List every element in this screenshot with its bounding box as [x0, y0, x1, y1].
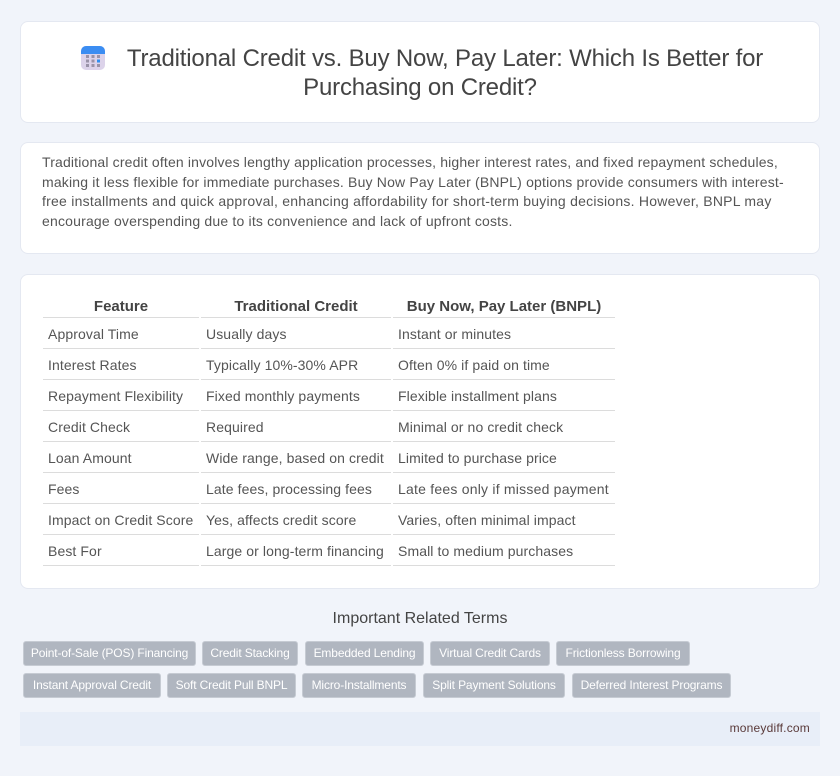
row: Impact on Credit Score: Impact on Credit Score	[48, 512, 193, 528]
panel: comparison table	[20, 274, 820, 589]
row: Repayment Flexibility: Flexible installment plans	[398, 388, 557, 404]
title: Traditional Credit vs. Buy Now, Pay Later: Which Is Better for	[127, 45, 763, 72]
row: Fees: Late fees, processing fees	[206, 481, 372, 497]
tag	[556, 641, 690, 666]
row: Best For: Large or long-term financing	[206, 543, 384, 559]
tag	[572, 673, 731, 698]
summary paragraph	[42, 154, 784, 229]
row: Interest Rates: Interest Rates	[48, 357, 137, 373]
summary paragraph: Traditional credit often involves lengthy application processes, higher interest rates, and fixed repayment schedules,	[42, 154, 778, 170]
row: Credit Check	[48, 419, 564, 435]
tag	[423, 673, 565, 698]
tag: Split Payment Solutions	[432, 678, 556, 692]
tag: Credit Stacking	[210, 646, 290, 660]
tag: Point-of-Sale (POS) Financing	[31, 646, 188, 660]
summary paragraph: making it less flexible for immediate purchases. Buy Now Pay Later (BNPL) options provide consumers with interest-	[42, 174, 784, 190]
tag	[23, 673, 161, 698]
row: Best For	[48, 543, 573, 559]
tag list: related terms	[23, 641, 731, 698]
tag	[23, 641, 196, 666]
tag	[305, 641, 424, 666]
row: Repayment Flexibility	[48, 388, 557, 404]
comparison table	[43, 298, 615, 566]
footer bar	[20, 712, 820, 746]
tag: Virtual Credit Cards	[439, 646, 541, 660]
row: Approval Time: Instant or minutes	[398, 326, 511, 342]
row: Repayment Flexibility: Repayment Flexibility	[48, 388, 183, 404]
row: Approval Time	[48, 326, 511, 342]
tag: Deferred Interest Programs	[581, 678, 722, 692]
heading: related terms: Important Related Terms	[333, 610, 507, 627]
summary paragraph: free installments and quick approval, enhancing affordability for short-term buying decisions. However, BNPL may	[42, 193, 772, 209]
tag: Instant Approval Credit	[33, 678, 151, 692]
column heading: Feature: Feature	[94, 298, 148, 315]
row: Loan Amount: Limited to purchase price	[398, 450, 557, 466]
row: Loan Amount: Loan Amount	[48, 450, 132, 466]
row: Credit Check: Credit Check	[48, 419, 130, 435]
row: Interest Rates	[48, 357, 550, 373]
panel: summary	[20, 142, 820, 254]
row: Credit Check: Required	[206, 419, 264, 435]
column heading: Traditional Credit: Traditional Credit	[234, 298, 358, 315]
row: Impact on Credit Score	[48, 512, 576, 528]
tag	[202, 641, 298, 666]
tag: Soft Credit Pull BNPL	[176, 678, 287, 692]
row: Repayment Flexibility: Fixed monthly payments	[206, 388, 360, 404]
icon: calendar	[81, 46, 105, 70]
footer site name: moneydiff.com	[730, 721, 810, 735]
row: Approval Time: Usually days	[206, 326, 287, 342]
tag: Frictionless Borrowing	[566, 646, 680, 660]
tag	[430, 641, 550, 666]
row: Best For: Small to medium purchases	[398, 543, 573, 559]
summary paragraph: encourage overspending due to its convenience and lack of upfront costs.	[42, 213, 513, 229]
title	[127, 45, 763, 101]
tag: Micro-Installments	[312, 678, 406, 692]
row: Impact on Credit Score: Varies, often minimal impact	[398, 512, 576, 528]
row: Interest Rates: Typically 10%-30% APR	[206, 357, 358, 373]
row: Loan Amount	[48, 450, 557, 466]
panel: header	[20, 21, 820, 123]
row: Impact on Credit Score: Yes, affects credit score	[206, 512, 356, 528]
row: Loan Amount: Wide range, based on credit	[206, 450, 384, 466]
title: Purchasing on Credit?	[303, 74, 537, 101]
row: Interest Rates: Often 0% if paid on time	[398, 357, 550, 373]
row: Fees: Late fees only if missed payment	[398, 481, 609, 497]
tag	[167, 673, 296, 698]
row: Fees	[48, 481, 609, 497]
column heading: BNPL: Buy Now, Pay Later (BNPL)	[407, 298, 601, 315]
row: Fees: Fees	[48, 481, 80, 497]
row: Approval Time: Approval Time	[48, 326, 139, 342]
row: Credit Check: Minimal or no credit check	[398, 419, 563, 435]
tag	[302, 673, 416, 698]
row: Best For: Best For	[48, 543, 102, 559]
tag: Embedded Lending	[314, 646, 415, 660]
